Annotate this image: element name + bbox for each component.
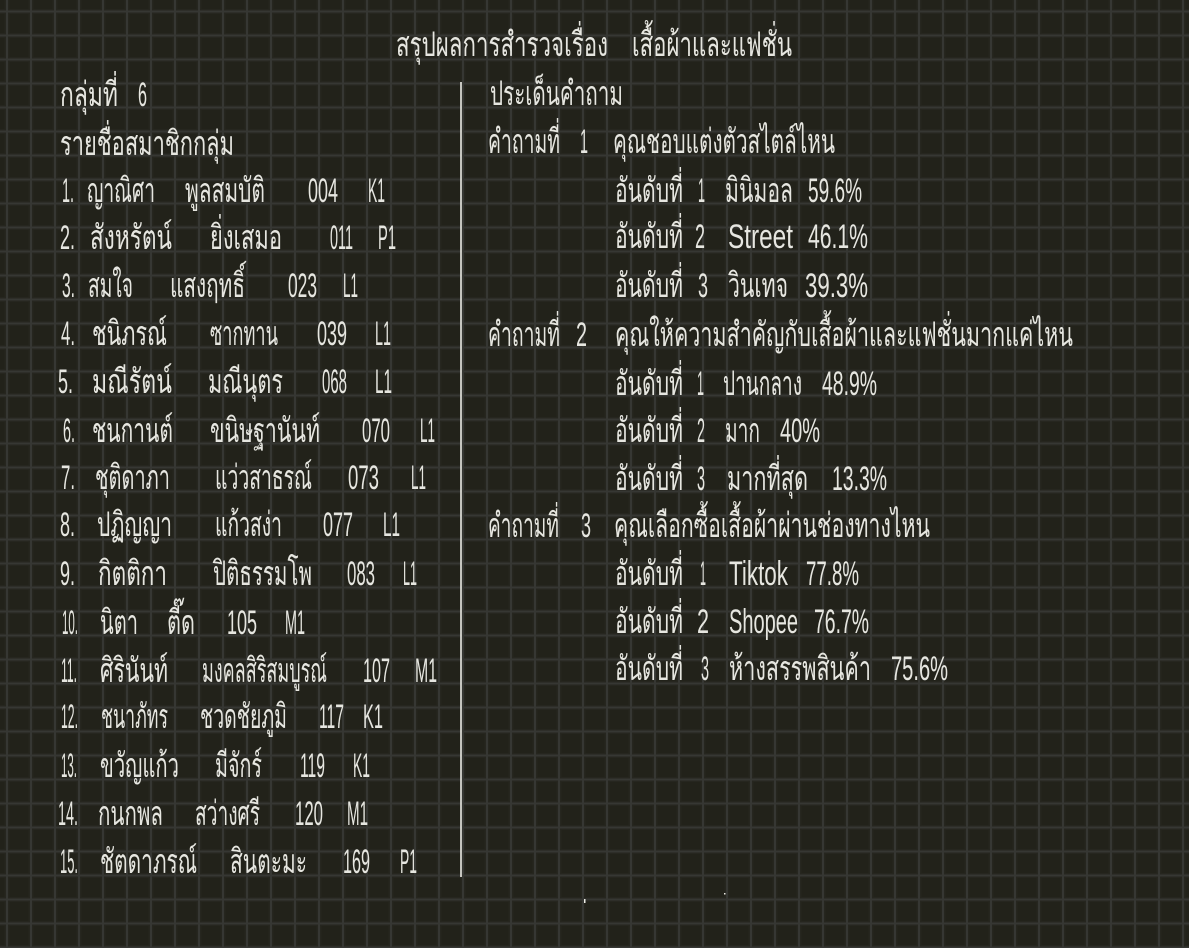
member 7: 073 [348, 459, 379, 497]
question 2 rank 3: 13.3% [832, 460, 887, 498]
question 3 rank 3: 75.6% [891, 650, 948, 688]
member 8: 077 [323, 506, 353, 544]
question 1 rank 1: 59.6% [808, 172, 862, 210]
panel: group members: K1 [368, 172, 385, 210]
member 2: สังหรัตน์ [90, 219, 172, 257]
member 5: 068 [322, 363, 347, 401]
question 3 rank 1: 77.8% [806, 555, 859, 593]
heading: question topics: ประเด็นคำถาม [490, 73, 623, 113]
question 1 rank 3: 39.3% [805, 267, 868, 305]
question 3: คำถามที่ [488, 502, 559, 545]
question 1 rank 3: 3 [698, 267, 708, 305]
text: M1 [415, 652, 437, 690]
question 2 rank 2: อันดับที่ [615, 407, 683, 450]
question 3 [488, 501, 930, 546]
member 3: แสงฤทธิ์ [170, 260, 247, 305]
member 15: สินตะมะ [230, 843, 307, 881]
question 2 rank 3: อันดับที่ [615, 455, 683, 498]
member 14: สว่างศรี [195, 795, 260, 833]
member 9 [60, 554, 417, 593]
member 1: ญาณิศา [87, 172, 155, 210]
member 12: ชนาภัทร [101, 698, 168, 736]
question 1 rank 1: มินิมอล [725, 172, 793, 210]
member 2: 2. [60, 219, 75, 257]
title [396, 20, 792, 65]
question 2 rank 1: ปานกลาง [723, 365, 802, 403]
member 9: ปิติธรรมโพ [213, 554, 312, 593]
title: เสื้อผ้าและแฟชั่น [632, 20, 792, 64]
question 1 rank 3: อันดับที่ [615, 262, 683, 305]
panel: group members: K1 [353, 747, 370, 785]
heading: group number: กลุ่มที่ [60, 71, 118, 115]
member 3: 023 [288, 267, 317, 305]
column divider [460, 82, 462, 877]
member 5 [58, 363, 392, 402]
member 15: 15. [60, 843, 78, 881]
question 3 rank 1: อันดับที่ [615, 550, 683, 593]
question 3 rank 3: 3 [701, 650, 709, 688]
member 8 [60, 506, 400, 544]
member 15: 169 [343, 843, 370, 881]
question 2 rank 2: มาก [725, 412, 760, 450]
member 8: 8. [60, 506, 75, 544]
member 1: 004 [308, 172, 338, 210]
member 9: 9. [60, 555, 75, 593]
question 2 [488, 310, 1073, 355]
question 1 rank 2 [615, 213, 868, 256]
member 12: 12. [61, 698, 78, 736]
member 13 [61, 747, 370, 785]
question 1 [488, 118, 835, 162]
panel: group members: L1 [375, 363, 392, 401]
question 3 rank 2: 2 [697, 603, 709, 641]
member 13: 119 [300, 747, 325, 785]
question 1 rank 3 [615, 262, 868, 305]
panel: group members: P1 [400, 843, 417, 881]
question 2 rank 2 [615, 407, 820, 450]
question 2 rank 1: อันดับที่ [615, 360, 683, 403]
title: สรุปผลการสำรวจเรื่อง [396, 21, 608, 65]
panel: group members: L1 [411, 459, 426, 497]
question 2 rank 3: 3 [697, 460, 705, 498]
panel: group members: P1 [378, 219, 396, 257]
member 15 [60, 843, 417, 881]
member 15: ชัตดาภรณ์ [100, 843, 197, 881]
question 3 rank 2: อันดับที่ [615, 598, 683, 641]
member 13: ขวัญแก้ว [100, 747, 179, 785]
question 3 rank 1: 1 [700, 555, 706, 593]
question 3: คุณเลือกซื้อเสื้อผ้าผ่านช่องทางไหน [614, 501, 930, 546]
member 2: 011 [330, 219, 353, 257]
member 11: ศิรินันท์ [100, 652, 168, 690]
question 1: คุณชอบแต่งตัวสไตล์ไหน [613, 122, 835, 162]
member 7: ชุติดาภา [95, 459, 170, 498]
member 13: 13. [61, 747, 77, 785]
member 13: มีจักร์ [215, 747, 262, 785]
question 3 rank 2: Shopee [729, 603, 798, 641]
member 1: พูลสมบัติ [185, 172, 265, 211]
member 3 [62, 260, 358, 305]
panel: group members: M1 [285, 604, 305, 642]
question 3 rank 3: อันดับที่ [615, 645, 683, 688]
panel: survey questions [488, 73, 1073, 688]
question 1 rank 2: Street [728, 218, 793, 256]
panel: group members: L1 [343, 267, 358, 305]
member 10: นิตา [100, 604, 138, 642]
member 5: มณีนุตร [208, 363, 283, 402]
panel: group members: L1 [383, 506, 400, 544]
member 14: กนกพล [98, 795, 163, 833]
question 2 rank 1 [615, 360, 877, 403]
question 3 rank 1 [615, 550, 859, 593]
member 6: 6. [63, 412, 75, 450]
panel: group members: 6 [138, 76, 147, 114]
member 2 [60, 214, 396, 257]
question 1 rank 2: อันดับที่ [615, 213, 683, 256]
text: L1 [420, 412, 435, 450]
question 2 rank 3 [615, 455, 887, 499]
panel: group members: M1 [347, 795, 368, 833]
member 5: 5. [58, 363, 73, 401]
member 10: ตี๊ด [167, 597, 195, 642]
member 12 [61, 698, 383, 737]
question 2 rank 2: 2 [697, 412, 705, 450]
member 3: สมใจ [88, 266, 133, 305]
panel: group members [58, 71, 437, 881]
question 3 rank 1: Tiktok [729, 555, 789, 593]
member 11 [61, 652, 437, 691]
member 9: กิตติกา [98, 555, 167, 593]
question 3 rank 2: 76.7% [814, 603, 869, 641]
question 3: 3 [581, 507, 591, 545]
member 3: 3. [62, 267, 75, 305]
member 11: 11. [61, 652, 77, 690]
heading: member list: รายชื่อสมาชิกกลุ่ม [60, 120, 234, 164]
question 1 rank 3: วินเทจ [728, 267, 788, 305]
question 3 rank 2 [615, 598, 869, 641]
member 14: 14. [58, 795, 78, 833]
member 10: 105 [227, 604, 257, 642]
question 2 rank 2: 40% [780, 412, 820, 450]
member 1 [62, 172, 385, 211]
member 4: ซากทาน [210, 315, 278, 353]
member 7 [61, 459, 426, 498]
member 6: ขนิษฐานันท์ [210, 412, 320, 451]
panel: group members: K1 [363, 698, 383, 736]
member 6: 070 [362, 412, 390, 450]
member 7: แว่วสาธรณ์ [215, 459, 312, 497]
member 9: 083 [347, 555, 375, 593]
question 3 rank 3 [615, 645, 948, 688]
member 6: ชนกานต์ [92, 412, 173, 450]
member 2: ยิ่งเสมอ [210, 214, 282, 257]
member 8: ปฏิญญา [97, 506, 172, 544]
member 14: 120 [295, 795, 323, 833]
member 10 [62, 597, 305, 642]
member 10: 10. [62, 604, 78, 642]
member 1: 1. [62, 172, 74, 210]
panel: group members: L1 [403, 555, 417, 593]
member 4: 039 [317, 315, 347, 353]
question 2 rank 1: 48.9% [822, 365, 877, 403]
question 1 rank 2: 46.1% [808, 218, 868, 256]
question 1 rank 1: 1 [698, 172, 705, 210]
question 1 rank 1: อันดับที่ [615, 167, 683, 210]
member 6 [63, 412, 435, 451]
member 4 [61, 315, 391, 353]
question 1 rank 2: 2 [695, 218, 705, 256]
question 2 rank 3: มากที่สุด [727, 455, 808, 499]
member 4: ชนิภรณ์ [92, 315, 167, 353]
question 3 rank 3: ห้างสรรพสินค้า [729, 650, 871, 688]
member 11: มงคลสิริสมบูรณ์ [202, 652, 327, 691]
member 5: มณีรัตน์ [92, 363, 172, 401]
question 2 rank 1: 1 [697, 365, 704, 403]
member 12: 117 [319, 698, 344, 736]
member 12: ชวดชัยภูมิ [200, 698, 287, 737]
question 2: 2 [576, 316, 587, 354]
member 8: แก้วสง่า [215, 506, 282, 544]
question 1: คำถามที่ [488, 118, 560, 161]
question 1: 1 [580, 123, 588, 161]
question 1 rank 1 [615, 167, 862, 210]
question 2: คำถามที่ [488, 311, 560, 354]
panel: group members: L1 [375, 315, 391, 353]
member 11: 107 [363, 652, 390, 690]
member 14 [58, 795, 368, 833]
member 7: 7. [61, 459, 75, 497]
member 4: 4. [61, 315, 75, 353]
